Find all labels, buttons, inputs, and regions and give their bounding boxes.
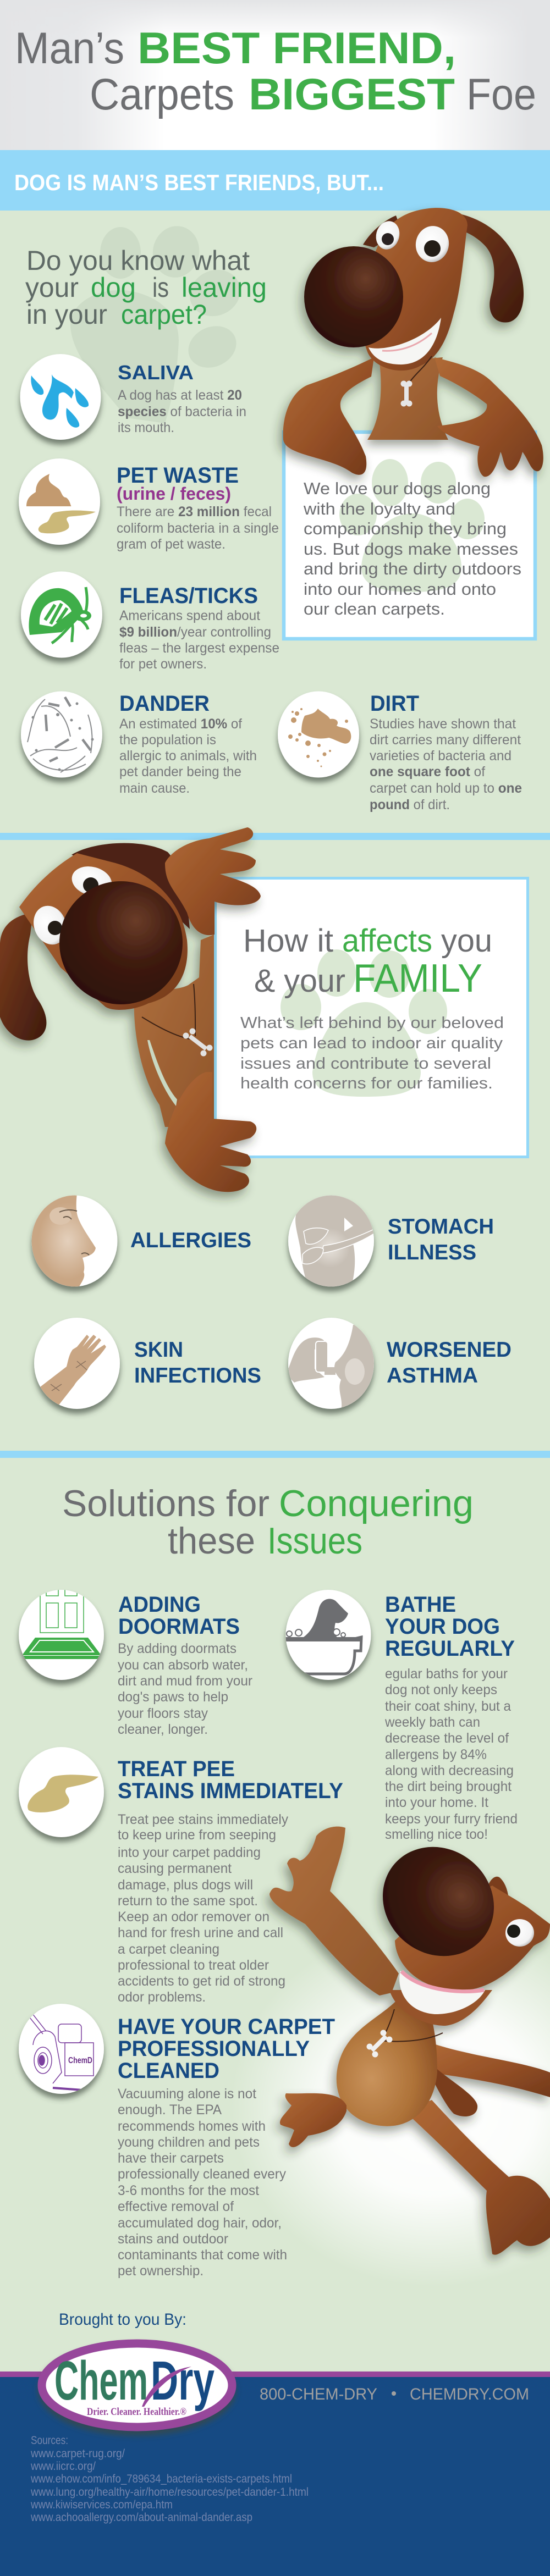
icon: dander — [21, 692, 102, 777]
bathe heading: YOUR DOG — [385, 1615, 500, 1639]
condition: worsened asthma — [286, 1318, 512, 1410]
card text: companionship they bring — [304, 519, 507, 538]
sources: www.lung.org/healthy-air/home/resources/pet-dander-1.html — [30, 2486, 309, 2498]
pee heading: STAINS IMMEDIATELY — [118, 1779, 343, 1803]
cleaning text: enough. The EPA — [118, 2102, 222, 2118]
skin label: INFECTIONS — [134, 1364, 261, 1387]
fleas text: Americans spend about — [119, 608, 260, 623]
cleaning text: young children and pets — [118, 2135, 260, 2150]
cleaning text: effective removal of — [118, 2199, 234, 2214]
dirt text: carpet can hold up to one — [370, 781, 522, 796]
sources: www.ehow.com/info_789634_bacteria-exists-carpets.html — [30, 2473, 292, 2485]
dog 2 head — [19, 853, 188, 1010]
bathe text — [384, 1666, 518, 1842]
icon: door and mat — [16, 1586, 107, 1680]
section stripe 2 — [0, 833, 550, 840]
pee text: hand for fresh urine and call — [118, 1925, 283, 1941]
cleaning heading: CLEANED — [118, 2059, 219, 2083]
dander text: the population is — [119, 732, 216, 748]
doormats text: dirt and mud from your — [118, 1673, 252, 1689]
dander text: pet dander being the — [119, 764, 241, 780]
contact line — [260, 2385, 529, 2403]
dander text — [119, 716, 257, 796]
card heading: affects — [342, 923, 432, 959]
pee text: a carpet cleaning — [118, 1942, 219, 1957]
cleaning text: Vacuuming alone is not — [118, 2086, 256, 2102]
chem-dry logo: Drier. Cleaner. Healthier.® — [87, 2406, 186, 2418]
title line 1: BEST FRIEND, — [138, 24, 456, 73]
icon: dirt splatter — [278, 692, 359, 777]
pee text: into your carpet padding — [118, 1845, 261, 1860]
title line 2: Carpets — [90, 70, 234, 119]
card text: into our homes and onto — [304, 579, 496, 599]
bathe text: egular baths for your — [385, 1666, 508, 1682]
doormats text — [118, 1641, 252, 1737]
chem-dry logo — [42, 2343, 232, 2427]
asthma label: WORSENED — [387, 1338, 512, 1362]
background paw print — [70, 222, 248, 423]
solutions heading: Issues — [267, 1520, 362, 1562]
pee text: to keep urine from seeping — [118, 1827, 276, 1843]
icon: pee stain — [19, 1747, 104, 1837]
footer band — [0, 2372, 550, 2576]
fleas text: $9 billion/year controlling — [119, 624, 271, 640]
blue heading band — [0, 150, 550, 211]
pee text: professional to treat older — [118, 1958, 269, 1973]
dog 2 upper hand — [165, 827, 261, 935]
item: dander — [21, 692, 257, 796]
item: pet waste: PET WASTE — [117, 463, 239, 488]
item: pet waste — [19, 458, 279, 552]
fleas text — [119, 608, 279, 672]
saliva text — [118, 388, 246, 435]
question heading: in your — [26, 299, 107, 330]
doormats text: dog's paws to help — [118, 1689, 228, 1705]
dirt text: Studies have shown that — [370, 716, 516, 732]
item: fleas and ticks: FLEAS/TICKS — [119, 584, 258, 608]
dog 1 nose — [304, 246, 403, 347]
question heading: dog — [91, 272, 136, 303]
bathe heading: BATHE — [385, 1593, 456, 1617]
icon: hand — [34, 1318, 120, 1409]
card text: We love our dogs along — [304, 479, 491, 498]
cleaning text: recommends homes with — [118, 2119, 266, 2134]
solution: adding doormats — [16, 1586, 252, 1737]
card text: our clean carpets. — [304, 599, 445, 618]
section stripe 3 — [0, 1451, 550, 1458]
condition: skin infections — [34, 1318, 261, 1409]
white glow behind dog 3 — [231, 1924, 550, 2287]
pet waste text — [117, 504, 279, 552]
icon: water drops — [20, 354, 101, 440]
item: dirt — [278, 692, 522, 812]
dog 3 back limb — [428, 2064, 477, 2116]
dog 3 necklace and bone — [366, 2009, 443, 2057]
sources: www.achooallergy.com/about-animal-dander.asp — [30, 2511, 252, 2524]
doormats text: By adding doormats — [118, 1641, 237, 1656]
doormats heading: DOORMATS — [118, 1615, 240, 1639]
stomach label — [388, 1215, 494, 1264]
dog 1 leaning on card — [283, 208, 543, 477]
title banner — [0, 0, 550, 150]
fleas text: fleas – the largest expense — [119, 640, 279, 656]
stomach label: STOMACH — [388, 1215, 494, 1239]
bathe text: their coat shiny, but a — [385, 1699, 511, 1714]
dog 2 left ear — [0, 913, 46, 1041]
pee text: causing permanent — [118, 1861, 232, 1876]
dog 3 raised arm — [270, 1827, 399, 1995]
bathe text: smelling nice too! — [385, 1827, 488, 1842]
card: we love our dogs — [284, 432, 535, 639]
sources: Sources: — [31, 2434, 68, 2447]
question heading: Do you know what — [26, 245, 250, 276]
dirt text: one square foot of — [370, 764, 485, 780]
bathe text: dog not only keeps — [385, 1682, 497, 1698]
item: fleas and ticks — [21, 572, 279, 672]
dirt text — [370, 716, 522, 812]
dog 2 eyes — [69, 862, 115, 900]
doormats text: cleaner, longer. — [118, 1722, 208, 1737]
dander text: allergic to animals, with — [119, 748, 257, 764]
pee text — [118, 1812, 288, 2005]
cleaning heading: PROFESSIONALLY — [118, 2037, 310, 2061]
saliva text: its mouth. — [118, 420, 174, 435]
solutions heading: Conquering — [279, 1483, 474, 1524]
card text: and bring the dirty outdoors — [304, 559, 521, 578]
pee heading — [118, 1757, 343, 1803]
card text: What’s left behind by our beloved — [240, 1014, 504, 1032]
card text: us. But dogs make messes — [304, 539, 518, 559]
pet waste text: There are 23 million fecal — [117, 504, 272, 519]
contact line: CHEMDRY.COM — [410, 2385, 529, 2403]
dog 2 top ear — [72, 843, 190, 929]
bathe text: allergens by 84% — [385, 1747, 487, 1762]
skin label: SKIN — [134, 1338, 183, 1362]
dog 1 eyes — [373, 218, 403, 252]
dog 3 nose — [361, 1825, 516, 1978]
card text — [303, 479, 521, 618]
card: how it affects you — [216, 878, 528, 1157]
pee text: damage, plus dogs will — [118, 1877, 253, 1893]
card text: health concerns for our families. — [240, 1075, 493, 1092]
card heading: you — [441, 923, 492, 959]
pee text: Treat pee stains immediately — [118, 1812, 288, 1827]
icon: flea — [21, 572, 102, 657]
solution: bathe your dog — [283, 1590, 518, 1842]
card heading: & your — [254, 963, 345, 999]
card heading — [243, 923, 492, 1000]
solutions heading: Solutions for — [62, 1483, 270, 1524]
item: saliva — [20, 354, 246, 440]
cleaning heading — [118, 2015, 335, 2083]
dog 1 necklace and bone — [400, 356, 432, 407]
brought to you by: Brought to you By: — [59, 2310, 186, 2329]
question heading: is — [152, 272, 169, 303]
question heading: carpet? — [121, 299, 207, 330]
pee heading: TREAT PEE — [118, 1757, 235, 1781]
doormats heading: ADDING — [118, 1593, 201, 1617]
cleaning text: have their carpets — [118, 2151, 224, 2166]
dog 3 side arm — [429, 2042, 550, 2097]
dog 1 ear — [440, 212, 524, 323]
blue heading band: DOG IS MAN’S BEST FRIENDS, BUT... — [14, 170, 384, 195]
question heading — [25, 245, 267, 330]
pet waste text: coliform bacteria in a single — [117, 521, 279, 536]
dog 2 peeking around card — [0, 827, 261, 1192]
asthma label: ASTHMA — [387, 1364, 478, 1387]
dog 3 head — [395, 1886, 550, 1990]
item: dirt: DIRT — [370, 692, 419, 716]
pee text: odor problems. — [118, 1989, 206, 2005]
bathe text: decrease the level of — [385, 1731, 509, 1746]
icon: inhaler — [286, 1318, 374, 1410]
fleas text: for pet owners. — [119, 656, 207, 672]
cleaning text: pet ownership. — [118, 2263, 204, 2279]
cleaning text: contaminants that come with — [118, 2247, 287, 2263]
dog 3 eye — [505, 1919, 534, 1947]
dog 3 jumping — [270, 1825, 550, 2255]
bathe text: along with decreasing — [385, 1763, 514, 1778]
dog 1 right arm — [435, 357, 543, 477]
asthma label — [387, 1338, 512, 1387]
card paw watermark — [280, 949, 447, 1097]
logo wordmark: Dry — [151, 2350, 215, 2412]
saliva text: species of bacteria in — [118, 404, 246, 419]
cleaning text — [118, 2086, 287, 2279]
card text: issues and contribute to several — [240, 1055, 491, 1073]
item: saliva: SALIVA — [118, 361, 194, 384]
icon: face — [22, 1193, 118, 1289]
bathe text: keeps your furry friend — [385, 1811, 518, 1827]
cleaning text: stains and outdoor — [118, 2231, 228, 2247]
title line 2: BIGGEST — [249, 70, 455, 119]
dog 3 body — [337, 2001, 437, 2126]
question heading: leaving — [182, 272, 267, 303]
card heading: FAMILY — [353, 957, 482, 1000]
cleaning text: accumulated dog hair, odor, — [118, 2215, 282, 2231]
dander text: main cause. — [119, 781, 190, 796]
sources: www.kiwiservices.com/epa.htm — [30, 2498, 173, 2511]
icon: pet waste — [19, 458, 100, 545]
contact line: 800-CHEM-DRY — [260, 2385, 377, 2403]
dirt text: varieties of bacteria and — [370, 748, 512, 764]
condition: stomach illness — [288, 1193, 494, 1287]
card paw watermark — [339, 459, 485, 592]
dog 3 mouth — [399, 1971, 485, 2014]
dander text: An estimated 10% of — [119, 716, 242, 732]
question heading: your — [25, 272, 79, 303]
cleaning text: 3-6 months for the most — [118, 2183, 259, 2198]
dog 3 ear — [487, 1877, 509, 1902]
cleaning text: professionally cleaned every — [118, 2166, 286, 2182]
dog 3 right leg — [404, 2100, 550, 2255]
bathe text: into your home. It — [385, 1795, 488, 1810]
dog 3 lower lip — [389, 1990, 492, 2026]
solution: professional cleaning — [19, 2004, 335, 2279]
dog 1 head — [352, 208, 468, 371]
sources: www.iicrc.org/ — [30, 2460, 96, 2473]
pee text: accidents to get rid of strong — [118, 1974, 285, 1989]
stomach label: ILLNESS — [388, 1241, 476, 1264]
icon: vacuum machine — [19, 2004, 104, 2094]
sources — [30, 2434, 309, 2524]
dog 2 nose — [59, 881, 183, 1004]
condition: allergies — [22, 1193, 251, 1289]
solution: treat pee stains — [19, 1747, 343, 2005]
card text — [240, 1014, 504, 1092]
solutions heading: these — [168, 1520, 255, 1562]
dog 2 lower hand — [165, 1072, 256, 1192]
title line 2: Foe — [466, 70, 536, 119]
condition: allergies: ALLERGIES — [130, 1229, 251, 1252]
skin label — [134, 1338, 261, 1387]
title line 2 — [90, 70, 536, 119]
doormats heading — [118, 1593, 240, 1639]
dirt text: pound of dirt. — [370, 797, 450, 812]
item: pet waste: (urine / feces) — [117, 484, 231, 504]
item: dander: DANDER — [119, 692, 210, 716]
doormats text: your floors stay — [118, 1706, 208, 1721]
saliva text: A dog has at least 20 — [118, 388, 242, 403]
bathe text: weekly bath can — [384, 1715, 480, 1730]
pee text: return to the same spot. — [118, 1893, 258, 1909]
dog 2 necklace and bone — [142, 984, 212, 1057]
dog 2 body — [134, 935, 214, 1127]
icon: vacuum machine: ChemD — [68, 2056, 92, 2065]
solutions heading — [62, 1483, 474, 1562]
card heading: How it — [243, 923, 333, 959]
bathe text: the dirt being brought — [385, 1779, 512, 1794]
card text: with the loyalty and — [303, 499, 455, 518]
bathe heading — [385, 1593, 515, 1661]
bathe heading: REGULARLY — [385, 1637, 515, 1661]
doormats text: you can absorb water, — [118, 1657, 248, 1673]
pet waste text: gram of pet waste. — [117, 537, 226, 552]
dog 1 left arm — [283, 357, 374, 475]
sources: www.carpet-rug.org/ — [30, 2447, 125, 2460]
title line 1: Man’s — [15, 24, 124, 73]
card text: pets can lead to indoor air quality — [240, 1035, 503, 1052]
icon: stomach — [288, 1193, 374, 1287]
dog 1 body — [367, 357, 448, 440]
dog 3 left foot — [280, 2093, 346, 2147]
logo wordmark: Chem — [54, 2350, 148, 2412]
icon: dog in tub — [283, 1590, 371, 1680]
pee text: Keep an odor remover on — [118, 1909, 270, 1925]
dirt text: dirt carries many different — [370, 732, 521, 748]
dog 1 mouth — [369, 318, 441, 364]
cleaning heading: HAVE YOUR CARPET — [118, 2015, 335, 2039]
